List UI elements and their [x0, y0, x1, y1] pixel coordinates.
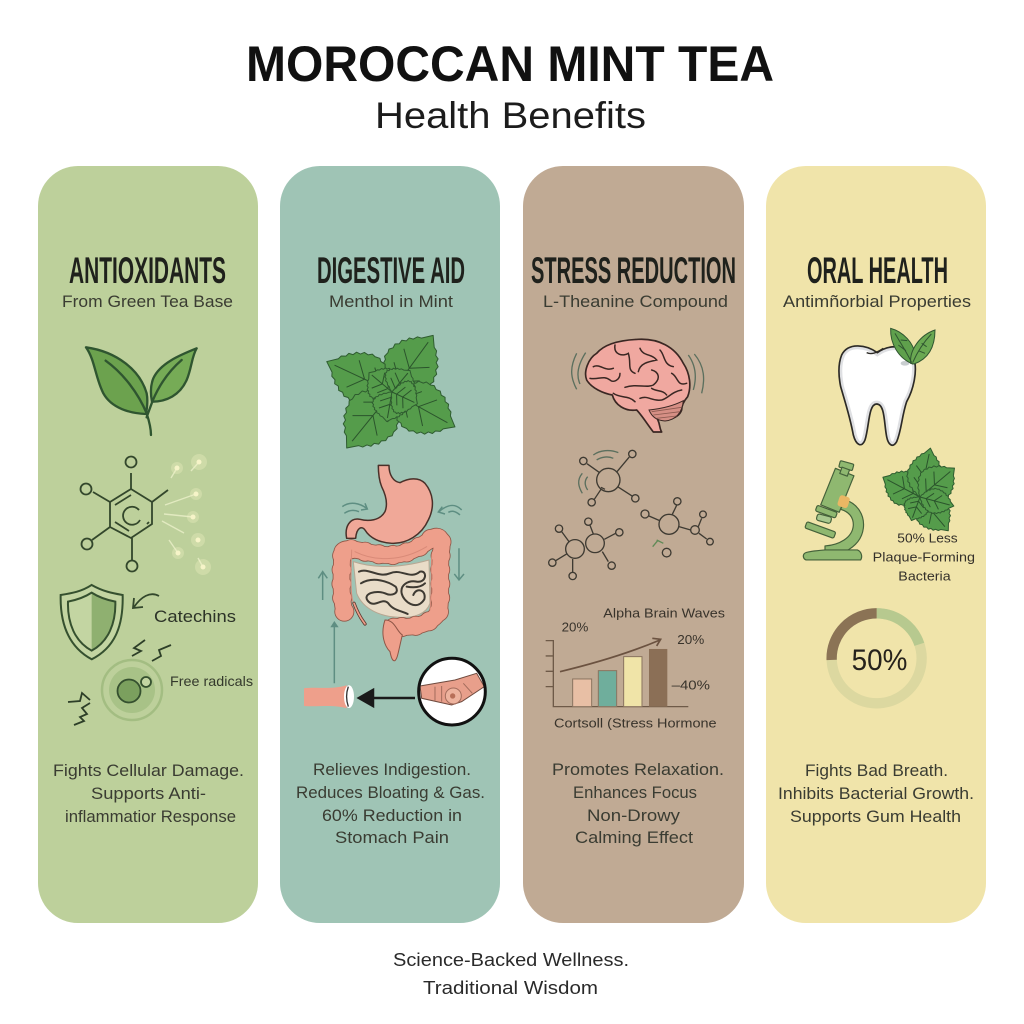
text: antioxidants benefits: Fights Cellular Damage. — [53, 761, 244, 780]
icon: mint sprig — [316, 319, 468, 465]
text: digestive benefits — [296, 760, 485, 847]
icon: brain — [586, 339, 690, 432]
panel: stress reduction — [523, 166, 744, 923]
colon — [341, 537, 442, 627]
stomach — [346, 465, 432, 543]
text: antioxidants benefits — [53, 761, 244, 826]
arrow: catechins pointer — [133, 594, 159, 608]
icon: lightning marks — [68, 640, 171, 725]
subheading: from green tea base: From Green Tea Base — [62, 292, 233, 311]
bar chart: alpha waves and cortisol — [546, 605, 726, 730]
donut chart: 50% — [832, 613, 922, 703]
text: plaque statistic: Plaque-Forming — [873, 550, 975, 565]
label: alpha brain waves: Alpha Brain Waves — [603, 605, 726, 620]
text: digestive benefits: 60% Reduction in — [322, 806, 462, 825]
small intestine — [353, 560, 430, 617]
icon: microscope — [803, 461, 864, 560]
icon: l-theanine molecules — [549, 450, 713, 580]
label: 20% right: 20% — [677, 632, 705, 647]
icon: calming waves — [572, 353, 704, 393]
footer tagline: Traditional Wisdom — [423, 978, 598, 998]
molecule one — [579, 450, 639, 506]
text: plaque statistic: 50% Less — [897, 530, 958, 545]
text: digestive benefits: Relieves Indigestion. — [313, 760, 471, 779]
text: plaque statistic: Bacteria — [898, 569, 951, 584]
arrow: magnifier pointer — [359, 690, 415, 706]
text: digestive benefits: Stomach Pain — [335, 828, 449, 847]
icon: tooth with mint — [839, 328, 935, 445]
label: catechins: Catechins — [154, 607, 236, 626]
text: digestive benefits: Reduces Bloating & Gas. — [296, 783, 485, 802]
icon: free radical atom — [102, 660, 162, 720]
molecule three — [641, 498, 713, 557]
subtitle: Health Benefits — [375, 95, 646, 136]
label: 20% left: 20% — [562, 620, 589, 635]
tooth leaves — [891, 328, 935, 364]
text: stress benefits: Enhances Focus — [573, 783, 697, 802]
text: oral benefits: Inhibits Bacterial Growth. — [778, 784, 974, 803]
subheading: l-theanine: L-Theanine Compound — [543, 292, 728, 311]
text: oral benefits: Fights Bad Breath. — [805, 761, 948, 780]
label: cortisol: Cortsoll (Stress Hormone — [554, 715, 717, 730]
text: stress benefits: Promotes Relaxation. — [552, 760, 724, 779]
subheading: menthol in mint: Menthol in Mint — [329, 292, 453, 311]
heading: stress reduction: STRESS REDUCTION — [531, 250, 736, 291]
footer tagline: Science-Backed Wellness. — [393, 950, 629, 970]
icon: small mint sprig — [875, 444, 966, 542]
donut chart: 50%: 50% — [852, 644, 907, 677]
text: antioxidants benefits: inflammatior Response — [65, 807, 236, 826]
heading: antioxidants: ANTIOXIDANTS — [69, 250, 226, 291]
panel: oral health — [766, 166, 986, 923]
icon: green tea leaves — [86, 347, 197, 435]
text: stress benefits — [552, 760, 724, 847]
icon: intestine tube — [304, 685, 354, 708]
title: MOROCCAN MINT TEA — [246, 36, 774, 92]
molecule two — [549, 518, 623, 580]
label: minus 40%: –40% — [672, 677, 710, 692]
panel: antioxidants — [38, 166, 258, 923]
text: oral benefits — [778, 761, 974, 826]
arrows: digestive motion — [318, 503, 464, 683]
illustration: digestive tract — [341, 465, 442, 661]
text: stress benefits: Calming Effect — [575, 828, 693, 847]
subheading: antimicrobial: Antimñorbial Properties — [783, 292, 971, 311]
text: stress benefits: Non-Drowy — [587, 806, 681, 825]
footer tagline — [393, 950, 629, 998]
text: antioxidants benefits: Supports Anti- — [91, 784, 206, 803]
panel: digestive aid — [280, 166, 500, 923]
icon: antioxidant molecule with sparkles — [80, 454, 211, 575]
rectum — [383, 620, 402, 661]
text: oral benefits: Supports Gum Health — [790, 807, 961, 826]
heading: digestive aid: DIGESTIVE AID — [317, 250, 465, 291]
label: free radicals: Free radicals — [170, 673, 253, 689]
icon: magnified intestine — [419, 658, 485, 725]
text: plaque statistic — [873, 530, 975, 584]
icon: shield — [61, 585, 123, 659]
